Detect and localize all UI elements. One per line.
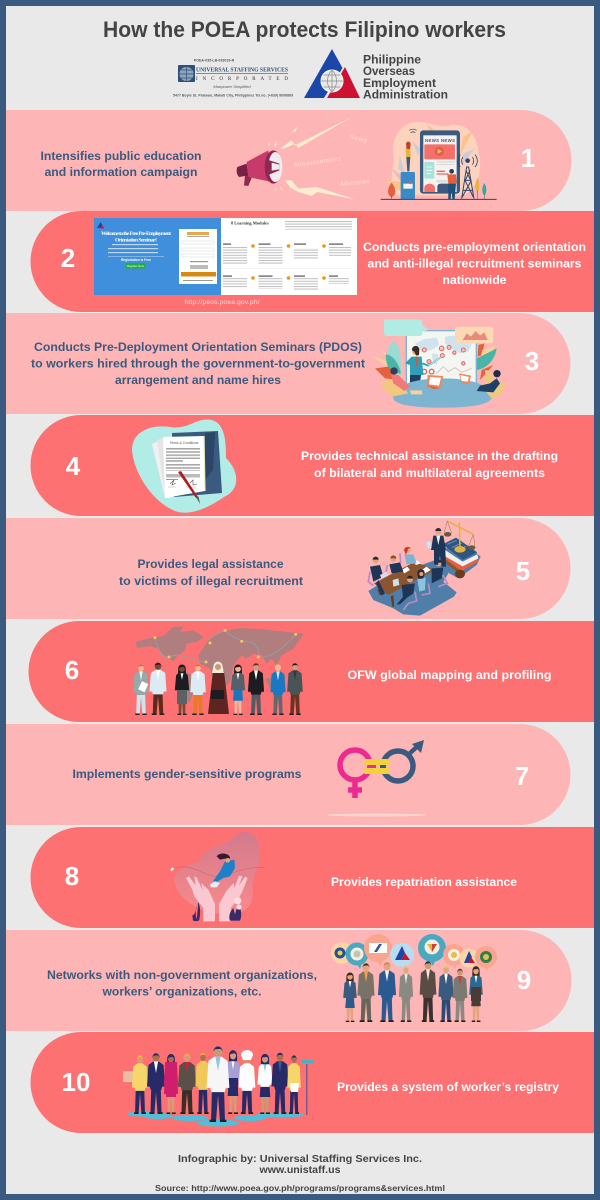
- text block 2: Conducts pre-employment orientation: [363, 241, 586, 254]
- number 5: 5: [516, 556, 530, 586]
- panel 8: [30, 827, 594, 928]
- number 1: 1: [521, 143, 535, 173]
- icon shadow: [326, 814, 426, 816]
- logo wordmark: Philippine: [363, 54, 421, 66]
- panel 3: [6, 313, 570, 414]
- speech labels: Announcements: [293, 156, 342, 169]
- panel 1: [6, 110, 572, 211]
- illustration: website screenshot: [94, 218, 357, 295]
- panel 9: [6, 930, 572, 1031]
- text block 1: Intensifies public education: [40, 150, 202, 163]
- number 2: 2: [61, 243, 75, 273]
- illustration: contract: Terms & Conditions: [170, 441, 199, 445]
- workers: [123, 1046, 314, 1122]
- speech labels: Advisories: [340, 179, 370, 188]
- number 10: 10: [62, 1067, 90, 1097]
- text block 9: [47, 969, 317, 998]
- speech labels: [293, 134, 370, 188]
- footer credits: www.unistaff.us: [258, 1164, 341, 1176]
- illustration: website screenshot: 8 Learning Modules: [231, 220, 269, 226]
- text block 3: to workers hired through the government-to-government: [31, 358, 365, 370]
- logo: Universal Staffing Services: 5477 Boyle St. Palanan, Makati City, Philippines Tel.no. (+639) 8006869: [173, 94, 293, 98]
- footer credits: Infographic by: Universal Staffing Services Inc.: [178, 1153, 422, 1165]
- logo: POEA: [304, 49, 448, 102]
- text block 2: nationwide: [442, 274, 507, 287]
- equal sign: [364, 759, 390, 774]
- text block 5: [119, 558, 303, 588]
- agency bubbles: [331, 934, 497, 971]
- workers: [343, 961, 483, 1022]
- illustration: seminar: [372, 319, 505, 408]
- panel 7: [6, 724, 570, 825]
- number 8: 8: [65, 861, 79, 891]
- logo: Universal Staffing Services: [173, 58, 293, 98]
- text block 8: Provides repatriation assistance: [331, 876, 518, 889]
- text block 3: Conducts Pre-Deployment Orientation Seminars (PDOS): [34, 341, 362, 354]
- hands: [186, 876, 248, 921]
- illustration: website screenshot: Orientation Seminar!: [115, 238, 157, 244]
- illustration: news app: [381, 122, 497, 199]
- speech labels: News: [348, 134, 367, 145]
- text block 5: to victims of illegal recruitment: [119, 575, 303, 588]
- illustration: partner agencies and workers: [331, 934, 497, 1022]
- panel 4: [30, 415, 594, 516]
- icon: POEA triangle: [304, 49, 360, 98]
- text block 4: [301, 450, 558, 480]
- illustration: news app: NEWS NEWS: [425, 138, 455, 143]
- world map: [136, 626, 303, 702]
- text block 4: of bilateral and multilateral agreements: [314, 467, 545, 480]
- panel 2: [30, 211, 594, 312]
- footer credits: Source: http://www.poea.gov.ph/programs/programs&services.html: [155, 1183, 445, 1193]
- icon: megaphone: [237, 117, 355, 199]
- icon: globe emblem: [178, 65, 195, 82]
- workers: [133, 662, 303, 715]
- logo: Universal Staffing Services: Manpower Simplified: [213, 84, 251, 89]
- text block 9: workers’ organizations, etc.: [101, 986, 262, 998]
- text block 4: Provides technical assistance in the drafting: [301, 450, 558, 463]
- title: How the POEA protects Filipino workers: [103, 17, 506, 42]
- number 6: 6: [65, 655, 79, 685]
- text block 6: OFW global mapping and profiling: [348, 669, 552, 682]
- text block 2: [363, 241, 586, 287]
- illustration: legal meeting: [368, 521, 481, 616]
- text block 10: Provides a system of worker’s registry: [337, 1081, 560, 1094]
- illustration: workers by occupation: [123, 1046, 314, 1126]
- logo: Universal Staffing Services: INCORPORATED: [196, 77, 288, 82]
- text block 1: and information campaign: [44, 166, 198, 179]
- text block 5: Provides legal assistance: [138, 558, 284, 571]
- icon: gender equality: [340, 740, 424, 798]
- panel 5: [6, 518, 570, 619]
- text block 3: [31, 341, 365, 387]
- panel 10: [30, 1032, 594, 1133]
- illustration: website screenshot: Welcome to the Free Pre-Employment: [101, 231, 171, 237]
- number 3: 3: [525, 346, 539, 376]
- text block 2: and anti-illegal recruitment seminars: [368, 258, 582, 270]
- number 9: 9: [517, 965, 531, 995]
- male symbol: [383, 740, 424, 781]
- ground: [127, 1112, 304, 1126]
- female symbol: [340, 750, 370, 798]
- footer credits: [155, 1153, 445, 1193]
- number 4: 4: [66, 451, 81, 481]
- illustration: website screenshot: Registration is Free: [121, 258, 151, 262]
- logo wordmark: Employment: [363, 78, 436, 90]
- logo: Universal Staffing Services: UNIVERSAL STAFFING SERVICES: [196, 66, 288, 74]
- illustration: contract: [132, 420, 236, 513]
- logo: Universal Staffing Services: POEA-035-LB-033019-R: [194, 58, 235, 62]
- source link: http://peos.poea.gov.ph/: [184, 299, 260, 306]
- number 7: 7: [515, 761, 529, 791]
- text block 3: arrangement and name hires: [115, 374, 281, 387]
- illustration: hands lifting worker: [170, 832, 265, 921]
- plants: [192, 897, 242, 921]
- logo wordmark: Overseas: [363, 66, 415, 78]
- logo wordmark: Administration: [363, 90, 448, 102]
- illustration: website screenshot: Register Now: [127, 264, 145, 268]
- panel 6: [28, 621, 594, 722]
- logo wordmark: [363, 54, 448, 102]
- text block 9: Networks with non-government organizations,: [47, 969, 317, 982]
- illustration: world map and workers: [133, 626, 303, 715]
- worker: [210, 854, 235, 887]
- text block 1: [40, 150, 202, 179]
- text block 7: Implements gender-sensitive programs: [72, 768, 302, 781]
